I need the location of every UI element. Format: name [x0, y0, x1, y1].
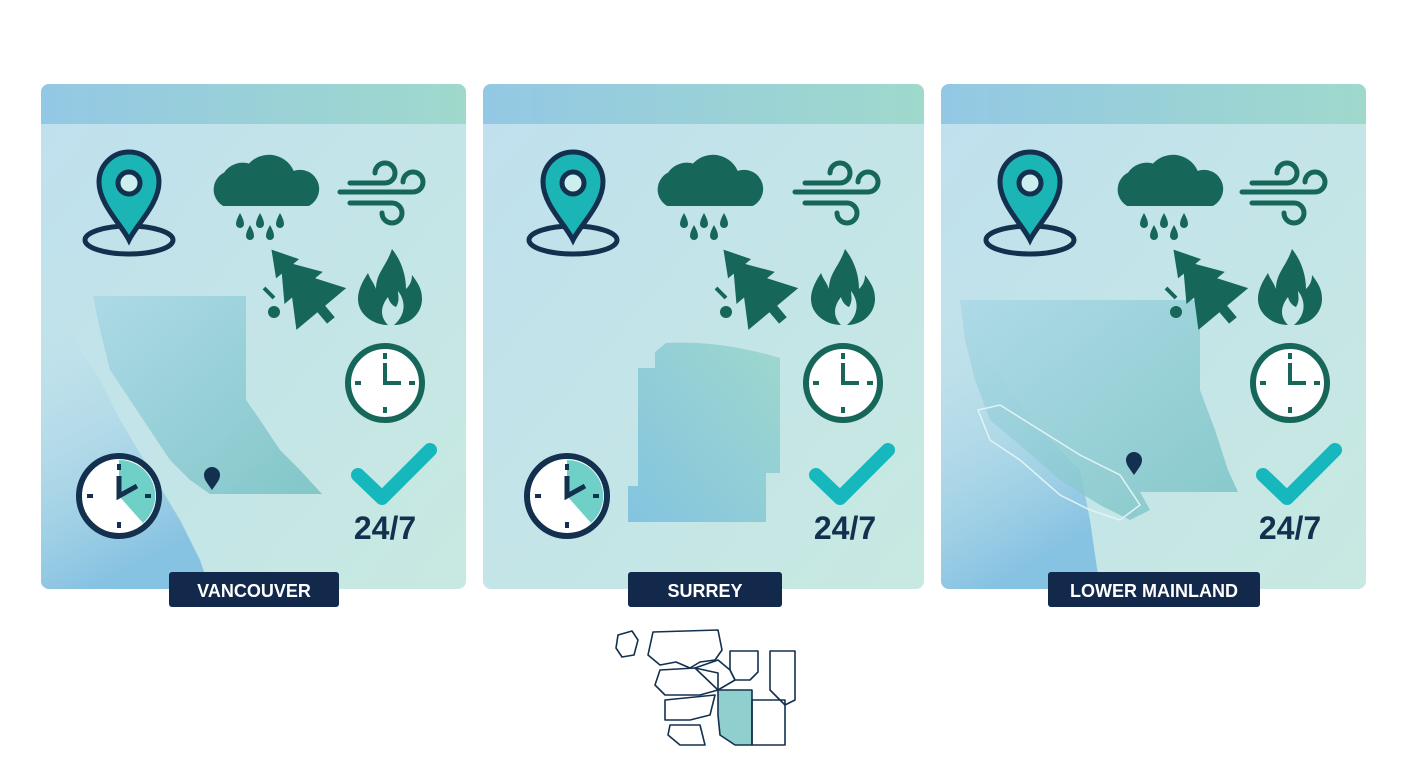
icon: clock — [348, 346, 422, 420]
panel: lower mainland — [941, 84, 1366, 607]
label: surrey: SURREY — [667, 581, 743, 601]
icon: rain cloud — [1121, 158, 1220, 240]
icon: small clock — [79, 456, 159, 536]
text: 24/7: 24/7 — [814, 510, 876, 546]
icon: check — [358, 450, 430, 498]
label: lower mainland — [1048, 572, 1260, 607]
icon: wind — [340, 163, 423, 223]
icon: wind — [795, 163, 878, 223]
icon: fire — [811, 249, 875, 325]
map: regional outline — [616, 630, 795, 745]
label: vancouver — [169, 572, 339, 607]
icon: check — [816, 450, 888, 498]
icon: pin — [85, 152, 173, 254]
header band — [941, 84, 1366, 124]
panel: surrey — [483, 84, 924, 607]
map: surrey — [628, 343, 780, 522]
icon: small location pin — [204, 467, 220, 490]
icon: small location pin — [1126, 452, 1142, 475]
text: 24/7: 24/7 — [354, 510, 416, 546]
icon: fallen tree — [1149, 229, 1258, 341]
icon: pin — [529, 152, 617, 254]
icon: small clock — [527, 456, 607, 536]
header band — [41, 84, 466, 124]
icon: rain cloud — [217, 158, 316, 240]
panel: vancouver — [41, 84, 466, 607]
label: surrey — [628, 572, 782, 607]
icon: wind — [1242, 163, 1325, 223]
icon: check — [1263, 450, 1335, 498]
label: vancouver: VANCOUVER — [197, 581, 311, 601]
map: lower mainland — [941, 290, 1238, 589]
icon: pin — [986, 152, 1074, 254]
text: 24/7: 24/7 — [1259, 510, 1321, 546]
map: BC coast — [41, 296, 322, 589]
header band — [483, 84, 924, 124]
icon: fallen tree — [247, 229, 356, 341]
icon: clock — [806, 346, 880, 420]
icon: rain cloud — [661, 158, 760, 240]
icon: clock — [1253, 346, 1327, 420]
icon: fire — [358, 249, 422, 325]
label: lower mainland: LOWER MAINLAND — [1070, 581, 1238, 601]
icon: fire — [1258, 249, 1322, 325]
icon: fallen tree — [699, 229, 808, 341]
